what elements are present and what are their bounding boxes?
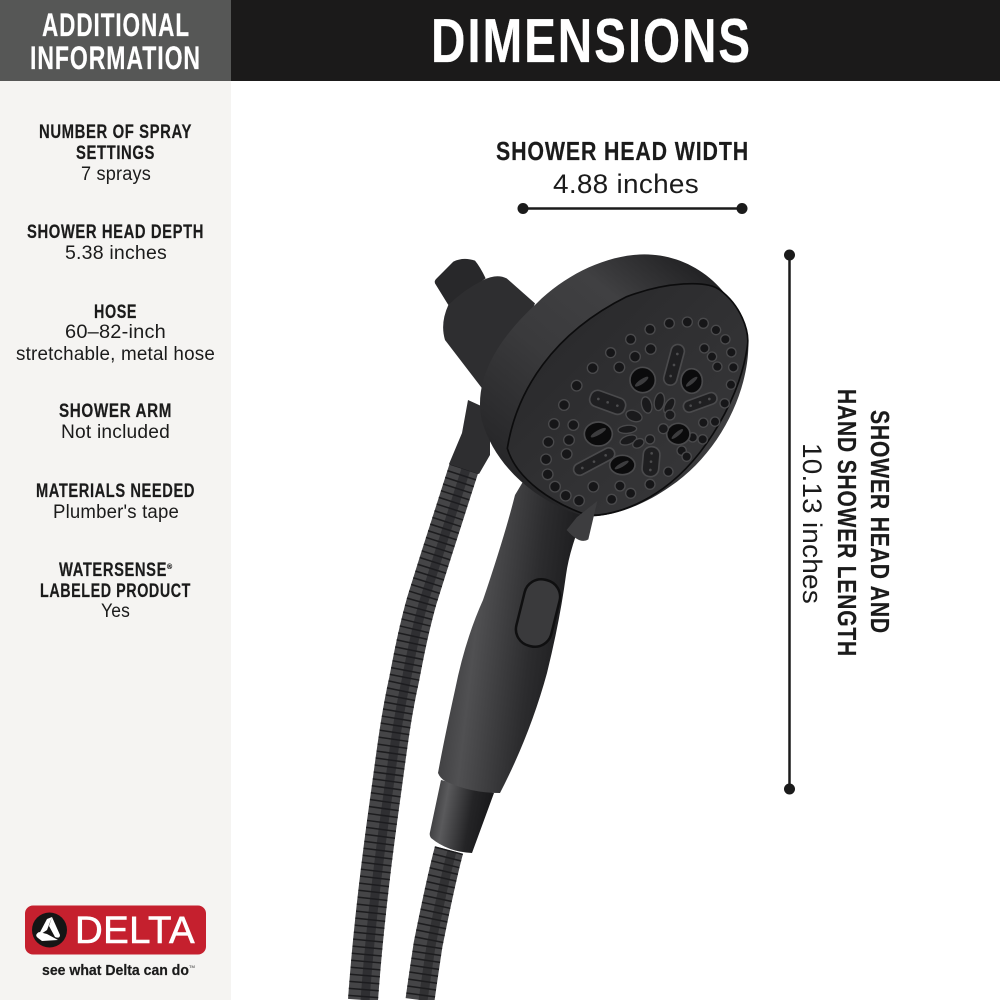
spec: shower arm bbox=[59, 401, 172, 443]
delta logo: see what Delta can do bbox=[42, 962, 189, 979]
handle button bbox=[512, 576, 564, 650]
delta logo: TM bbox=[189, 964, 195, 969]
shower product illustration bbox=[363, 254, 748, 1000]
spec: materials needed: Plumber's tape bbox=[53, 502, 179, 523]
spec: materials needed bbox=[36, 481, 195, 523]
large spray holes bbox=[584, 367, 702, 475]
spec: spray settings: NUMBER OF SPRAY bbox=[39, 122, 192, 143]
spec: spray settings: 7 sprays bbox=[81, 164, 151, 185]
header: dimensions: DIMENSIONS bbox=[431, 7, 752, 76]
spray nozzles bbox=[541, 317, 738, 506]
spec: shower head depth: 5.38 inches bbox=[65, 243, 167, 264]
length dimension: SHOWER HEAD AND bbox=[865, 410, 895, 634]
spec: hose: HOSE bbox=[94, 302, 137, 323]
header: additional information: ADDITIONAL bbox=[42, 7, 190, 43]
center petals bbox=[618, 392, 677, 450]
spec: hose: stretchable, metal hose bbox=[16, 344, 215, 365]
spec: spray settings: SETTINGS bbox=[76, 143, 155, 164]
upper hose bbox=[363, 468, 466, 1000]
spec: watersense: LABELED PRODUCT bbox=[40, 581, 191, 602]
head assembly, drawn in 3x crop coordinates bbox=[435, 254, 748, 541]
pill spray dots bbox=[581, 353, 711, 471]
header: additional information: INFORMATION bbox=[30, 40, 201, 76]
sidebar panel bbox=[0, 81, 231, 1000]
hole highlights bbox=[590, 375, 699, 471]
spec: shower arm: SHOWER ARM bbox=[59, 401, 172, 422]
header: dimensions bbox=[231, 0, 1000, 81]
spec: spray settings bbox=[39, 122, 192, 185]
spec: watersense: Yes bbox=[101, 601, 130, 622]
lower hose bbox=[420, 850, 452, 1000]
head face bbox=[507, 284, 748, 515]
handle collar bbox=[430, 780, 494, 853]
length dimension: 10.13 inches bbox=[797, 443, 827, 604]
spec: watersense: ® bbox=[167, 563, 173, 571]
spec: shower arm: Not included bbox=[61, 422, 170, 443]
spec: watersense: WATERSENSE bbox=[59, 560, 167, 581]
length dimension: HAND SHOWER LENGTH bbox=[832, 389, 862, 657]
header: additional information bbox=[0, 0, 231, 81]
spec: materials needed: MATERIALS NEEDED bbox=[36, 481, 195, 502]
head body bbox=[480, 254, 748, 517]
width dimension bbox=[496, 136, 749, 214]
arm connector collar bbox=[443, 276, 535, 390]
hose neck bbox=[449, 400, 490, 474]
width dimension: SHOWER HEAD WIDTH bbox=[496, 136, 749, 166]
spec: watersense bbox=[40, 560, 191, 622]
elongated spray pills bbox=[571, 343, 719, 477]
arm connector cap bbox=[435, 259, 486, 305]
delta logo bbox=[25, 906, 206, 979]
handle bbox=[438, 470, 590, 793]
width dimension: 4.88 inches bbox=[553, 169, 699, 199]
spec: hose: 60–82-inch bbox=[65, 322, 166, 343]
delta logo: DELTA bbox=[75, 910, 195, 952]
spec: shower head depth bbox=[27, 222, 204, 264]
trigger lever bbox=[567, 501, 597, 541]
spec: hose bbox=[16, 302, 215, 365]
spec: shower head depth: SHOWER HEAD DEPTH bbox=[27, 222, 204, 243]
length dimension bbox=[784, 250, 895, 794]
